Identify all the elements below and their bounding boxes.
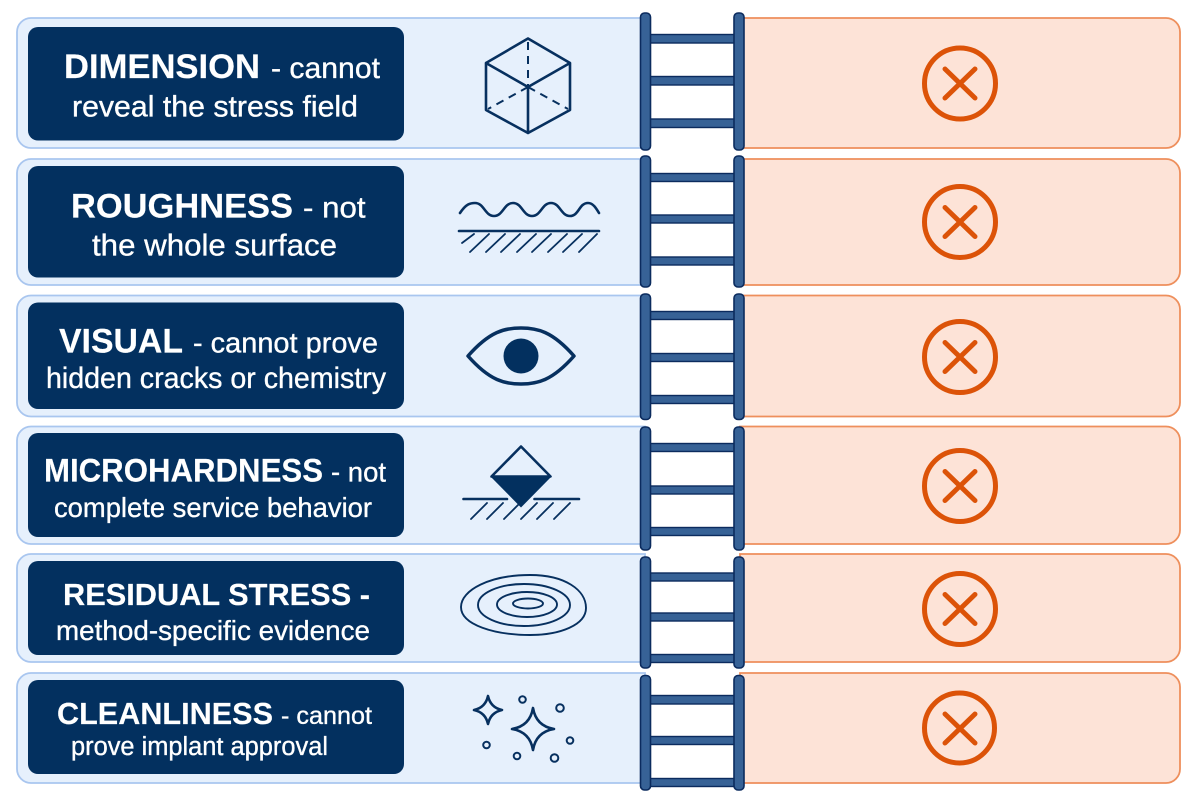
label: roughness: the whole surface <box>92 228 337 262</box>
panel: cleanliness result <box>740 673 1180 783</box>
label: cleanliness: prove implant approval <box>71 733 328 761</box>
label: roughness: ROUGHNESS <box>71 188 293 226</box>
label: cleanliness <box>28 680 404 774</box>
label: microhardness: complete service behavior <box>54 492 372 523</box>
panel: visual result <box>740 296 1180 416</box>
panel: residual stress result <box>740 554 1180 662</box>
icon: failed x <box>924 450 996 522</box>
label: cleanliness: - cannot <box>281 702 372 730</box>
label: residual stress: RESIDUAL STRESS - <box>63 577 370 612</box>
label: cleanliness: CLEANLINESS <box>57 696 273 731</box>
label: visual: - cannot prove <box>193 328 378 360</box>
row: roughness <box>17 156 1180 287</box>
label: visual: hidden cracks or chemistry <box>46 362 386 395</box>
label: roughness: - not <box>303 192 366 224</box>
panel: dimension method <box>17 18 645 148</box>
ladder connector <box>640 676 744 790</box>
ladder connector <box>640 294 744 420</box>
icon: cube <box>486 38 570 133</box>
label: dimension <box>28 27 404 140</box>
label: visual: VISUAL <box>59 322 183 360</box>
panel: roughness method <box>17 159 645 285</box>
icon: surface roughness wave <box>459 203 599 252</box>
panel: roughness result <box>740 159 1180 285</box>
label: dimension: - cannot <box>271 52 381 85</box>
row: cleanliness <box>17 673 1180 790</box>
panel: visual method <box>17 296 645 416</box>
label: dimension: reveal the stress field <box>72 90 358 124</box>
panel: microhardness method <box>17 426 645 544</box>
icon: hardness indenter <box>464 446 579 519</box>
ladder connector <box>640 156 744 287</box>
label: visual <box>28 302 404 409</box>
icon: failed x <box>924 186 996 258</box>
row: dimension <box>17 13 1180 150</box>
icon: sparkles and particles <box>474 696 573 762</box>
label: residual stress <box>28 561 404 655</box>
row: visual <box>17 294 1180 420</box>
icon: failed x <box>924 693 994 763</box>
icon: failed x <box>924 574 996 644</box>
label: microhardness: - not <box>331 456 386 488</box>
panel: residual stress method <box>17 554 645 662</box>
icon: failed x <box>924 48 996 119</box>
label: residual stress: method-specific evidence <box>56 615 370 646</box>
ladder connector <box>640 13 744 150</box>
panel: microhardness result <box>740 426 1180 544</box>
panel: cleanliness method <box>17 673 645 783</box>
row: residual stress <box>17 554 1180 668</box>
label: dimension: DIMENSION <box>64 48 260 86</box>
panel: dimension result <box>740 18 1180 148</box>
label: microhardness <box>28 433 404 537</box>
label: roughness <box>28 166 404 278</box>
ladder connector <box>640 557 744 668</box>
icon: stress contours <box>461 575 586 635</box>
icon: eye <box>468 328 574 384</box>
row: microhardness <box>17 426 1180 550</box>
icon: failed x <box>924 322 996 392</box>
ladder connector <box>640 427 744 550</box>
label: microhardness: MICROHARDNESS <box>44 452 323 488</box>
